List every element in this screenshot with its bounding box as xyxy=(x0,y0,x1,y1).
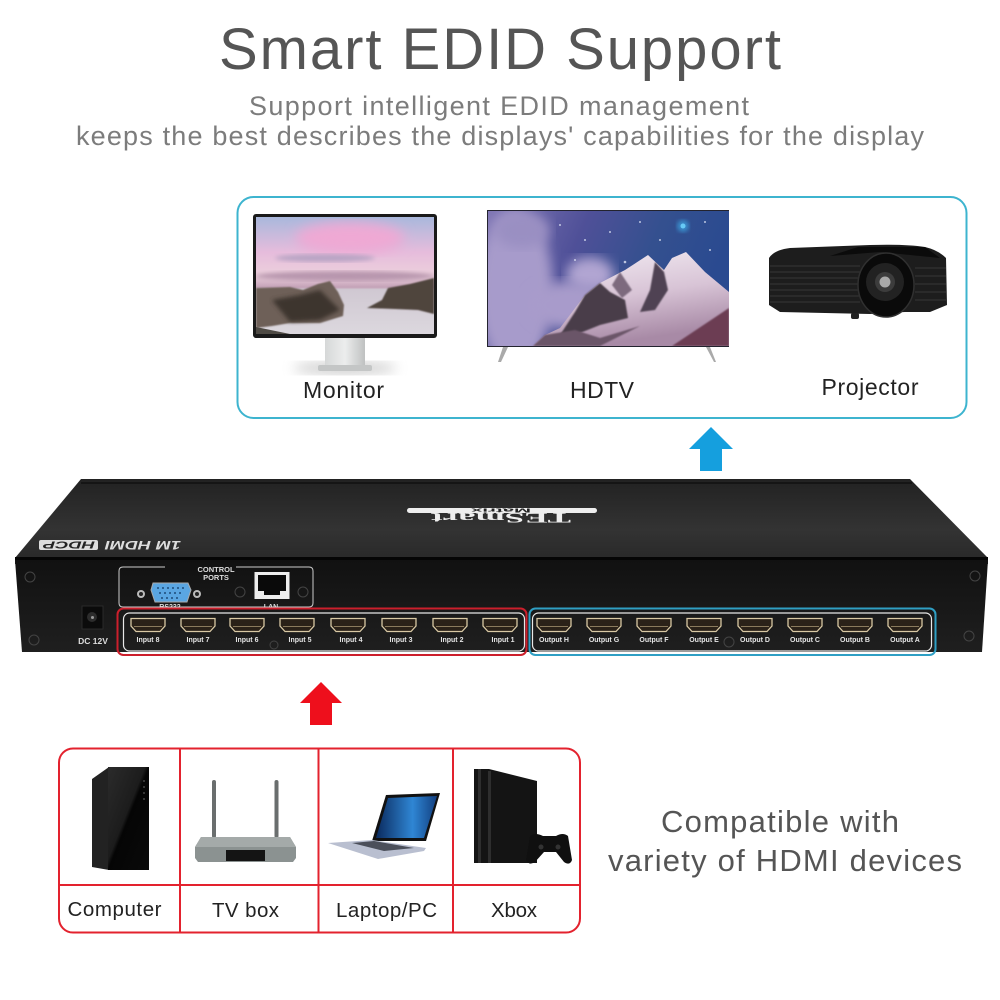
output ports group xyxy=(530,608,936,655)
icon: TV box xyxy=(195,780,296,862)
panel: output displays xyxy=(238,197,966,418)
control ports block: PORTS xyxy=(203,573,229,582)
arrow: red input arrow xyxy=(300,682,342,725)
input ports group: Input 8 xyxy=(137,637,160,644)
device front face xyxy=(15,560,988,652)
label: Xbox: Xbox xyxy=(491,899,538,922)
input ports group: Input 4 xyxy=(340,637,363,644)
icon: laptop xyxy=(328,793,440,859)
text: compatibility note: Compatible with xyxy=(661,804,899,839)
icon: monitor xyxy=(253,214,437,374)
device top face xyxy=(15,479,988,564)
subtitle: Support intelligent EDID management xyxy=(249,91,749,121)
text: compatibility note: variety of HDMI devices xyxy=(608,843,962,878)
output ports group: Output A xyxy=(890,637,920,644)
label: Computer: Computer xyxy=(68,898,162,921)
output ports group: Output H xyxy=(539,637,569,644)
label: Projector: Projector xyxy=(822,374,919,400)
DC power jack xyxy=(78,606,108,646)
icon: console and controller xyxy=(474,769,572,864)
icon: HDTV xyxy=(477,210,729,370)
chassis screws xyxy=(25,571,980,649)
input ports group xyxy=(118,608,526,655)
brand logo: TESmart xyxy=(431,509,571,525)
output ports group: Output D xyxy=(740,637,770,644)
output ports group: Output G xyxy=(589,637,620,644)
label: HDTV: HDTV xyxy=(570,377,635,403)
label: TV box: TV box xyxy=(212,899,280,922)
brand logo xyxy=(407,506,597,525)
device: HDMI matrix switch xyxy=(15,479,988,655)
icon: projector xyxy=(769,245,947,319)
control ports block: CONTROL xyxy=(197,565,235,574)
icon: computer tower xyxy=(92,767,149,870)
subtitle: keeps the best describes the displays' capabilities for the display xyxy=(76,121,924,151)
label: Monitor: Monitor xyxy=(303,377,384,403)
HDCP and HDMI logos: 1M HDMI xyxy=(104,538,181,552)
output ports group: Output B xyxy=(840,637,870,644)
output ports group: Output F xyxy=(639,637,669,644)
text: compatibility note xyxy=(608,804,962,878)
input ports group: Input 2 xyxy=(441,637,464,644)
title: Smart EDID Support xyxy=(219,17,781,82)
input ports group: Input 3 xyxy=(390,637,413,644)
HDCP and HDMI logos xyxy=(39,538,181,552)
panel: source devices table xyxy=(59,748,580,932)
input ports group: Input 5 xyxy=(289,637,312,644)
HDCP and HDMI logos: HDCP xyxy=(42,538,95,550)
input ports group: Input 7 xyxy=(187,637,210,644)
control ports block: LAN xyxy=(264,604,278,611)
output ports group: Output E xyxy=(689,637,719,644)
control ports block xyxy=(119,565,313,611)
DC power jack: DC 12V xyxy=(78,636,108,646)
subtitle xyxy=(76,91,924,151)
input ports group: Input 6 xyxy=(236,637,259,644)
input ports group: Input 1 xyxy=(492,637,515,644)
control ports block: RS232 xyxy=(159,604,181,611)
arrow: blue output arrow xyxy=(689,427,733,471)
brand logo: Matrix xyxy=(470,506,531,512)
output ports group: Output C xyxy=(790,637,820,644)
label: Laptop/PC: Laptop/PC xyxy=(336,899,437,922)
